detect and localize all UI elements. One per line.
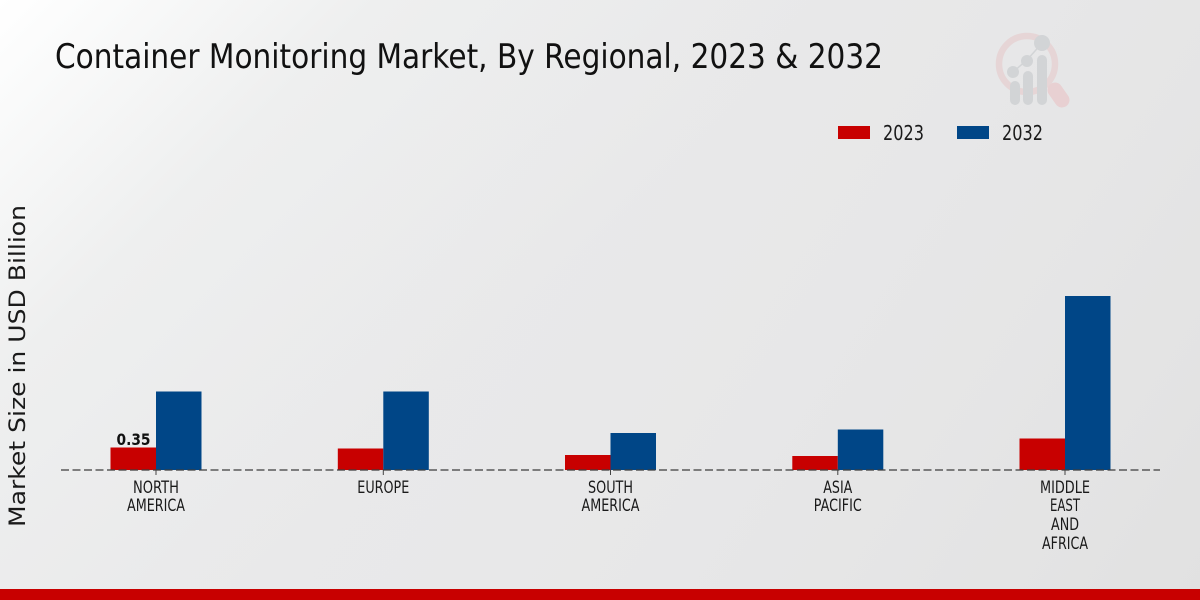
x axis labels bbox=[127, 478, 1090, 553]
bars: Europe bbox=[338, 392, 429, 470]
label: Middle East and Africa: EAST bbox=[1050, 496, 1081, 515]
label: Middle East and Africa: MIDDLE bbox=[1040, 478, 1090, 497]
label: Asia Pacific: ASIA bbox=[823, 478, 853, 497]
label: North America: NORTH bbox=[133, 478, 179, 497]
label: Asia Pacific bbox=[814, 478, 862, 515]
icon: watermark logo bbox=[999, 35, 1062, 105]
bars: Middle East and Africa bbox=[1020, 296, 1110, 470]
bars: North America bbox=[110, 392, 202, 470]
data label 0.35: 0.35 bbox=[116, 430, 150, 449]
x axis baseline bbox=[61, 469, 1160, 471]
label: Asia Pacific: PACIFIC bbox=[814, 496, 862, 515]
bar chart bbox=[61, 296, 1160, 475]
bars: South America bbox=[565, 433, 656, 470]
label: North America bbox=[127, 478, 186, 515]
legend swatch 2032 bbox=[957, 126, 989, 139]
label: Europe: EUROPE bbox=[357, 478, 409, 497]
legend label 2023: 2023 bbox=[883, 121, 924, 145]
label: Middle East and Africa bbox=[1040, 478, 1090, 553]
footer bar bbox=[0, 589, 1200, 600]
label: Middle East and Africa: AND bbox=[1051, 515, 1079, 534]
legend bbox=[838, 121, 1043, 145]
label: South America: AMERICA bbox=[582, 496, 640, 515]
label: South America bbox=[582, 478, 640, 515]
label: North America: AMERICA bbox=[127, 496, 186, 515]
label: Middle East and Africa: AFRICA bbox=[1042, 534, 1089, 553]
title: Container Monitoring Market, By Regional, 2023 & 2032 bbox=[55, 37, 883, 77]
legend swatch 2023 bbox=[838, 126, 870, 139]
legend label 2032: 2032 bbox=[1002, 121, 1043, 145]
label: South America: SOUTH bbox=[588, 478, 633, 497]
bars: Asia Pacific bbox=[792, 430, 883, 470]
y axis title: Market Size in USD Billion bbox=[5, 205, 31, 527]
